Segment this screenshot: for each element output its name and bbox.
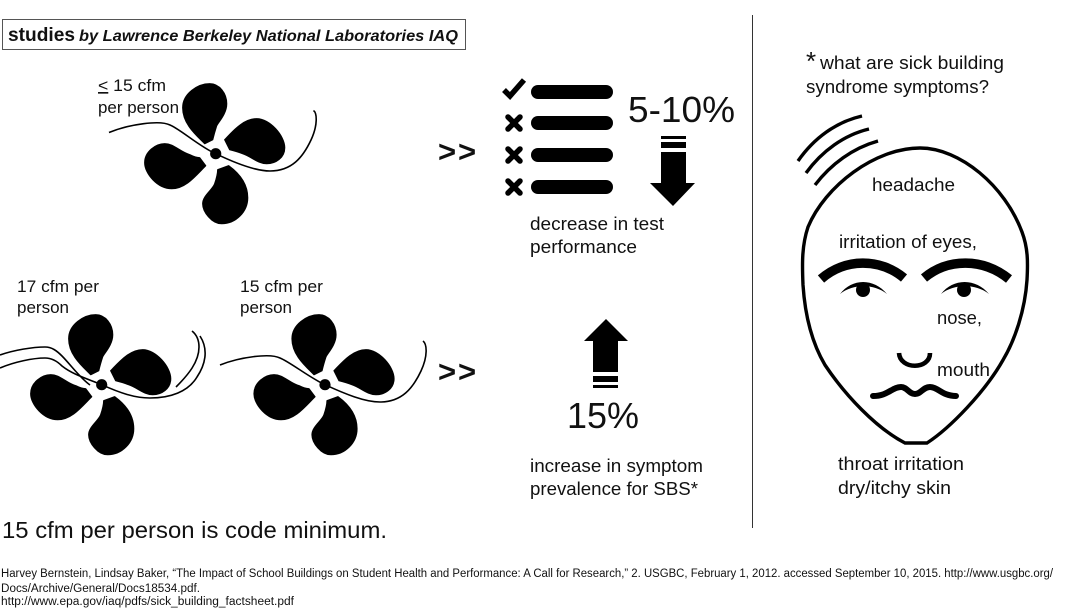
icon: cross 2 (508, 149, 520, 161)
icon: cross 1 (508, 117, 520, 129)
heading: studies (2, 20, 466, 50)
label: under 15 cfm per person: < 15 cfm (98, 77, 166, 95)
icon: fan with single airflow line (109, 84, 316, 224)
heading: studies: studies (8, 25, 75, 46)
arrow: chevrons to SBS result: > (458, 354, 476, 389)
icon: headache arcs (798, 116, 878, 185)
footer: sources: Docs/Archive/General/Docs18534.pdf. (1, 583, 200, 595)
stat: 5-10%: 5-10% (628, 89, 735, 130)
arrow: decrease (650, 136, 695, 206)
label: 17 cfm per person (17, 278, 100, 317)
icon: nose (899, 353, 930, 366)
heading: what are sick building syndrome symptoms (806, 46, 1004, 97)
icon: check mark (504, 80, 524, 96)
text: increase in symptom prevalence: increase in symptom (530, 456, 703, 476)
heading: what are sick building syndrome symptoms: * (806, 46, 816, 76)
heading: what are sick building syndrome symptoms: syndrome symptoms? (806, 77, 989, 97)
label: 17 cfm per person: 17 cfm per (17, 278, 100, 296)
icon: fan with double airflow lines (0, 315, 205, 455)
label: 15 cfm per person: person (240, 299, 292, 317)
text: throat and skin symptoms: throat irritation (838, 454, 964, 474)
footer: sources (1, 568, 1054, 608)
text: increase in symptom prevalence (530, 456, 703, 499)
footer: sources: Harvey Bernstein, Lindsay Baker, “The Impact of School Buildings on Student Health and Performance: A Call for Research,” 2. USGBC, February 1, 2012. accessed September 10, 2015. http://www.usgbc.org/ (1, 568, 1054, 580)
list bar 4 (531, 180, 613, 194)
icon: mouth (873, 387, 956, 396)
footer: sources: http://www.epa.gov/iaq/pdfs/sick_building_factsheet.pdf (1, 596, 295, 608)
icon: right eyebrow (924, 263, 1009, 279)
text: irritation of eyes: irritation of eyes, (839, 232, 977, 252)
arrow: increase (584, 319, 628, 388)
arrow: chevrons to test result: > (438, 134, 456, 169)
icon: fan with airflow line (220, 315, 426, 455)
arrow: chevrons to test result: > (458, 134, 476, 169)
text: mouth: mouth (937, 360, 990, 380)
text: throat and skin symptoms: dry/itchy skin (838, 478, 951, 498)
text: throat and skin symptoms (838, 454, 964, 498)
label: under 15 cfm per person: per person (98, 99, 179, 117)
text: nose: nose, (937, 308, 982, 328)
icon: left eyebrow (821, 263, 904, 279)
text: decrease in test performance: performance (530, 237, 637, 257)
arrow: chevrons to SBS result: > (438, 354, 456, 389)
list bar 1 (531, 85, 613, 99)
label: 15 cfm per person: 15 cfm per (240, 278, 324, 296)
label: 15 cfm per person (240, 278, 324, 317)
stat: 15%: 15% (567, 395, 639, 436)
icon: right eye (941, 282, 989, 297)
icon: left eye (840, 282, 887, 297)
list bar 3 (531, 148, 613, 162)
arrow: chevrons to test result (438, 134, 476, 169)
icon: test checklist (504, 80, 613, 194)
text: code minimum note: 15 cfm per person is code minimum. (2, 517, 387, 543)
text: decrease in test performance: decrease in test (530, 214, 664, 234)
label: under 15 cfm per person (98, 77, 179, 117)
text: increase in symptom prevalence: prevalence for SBS* (530, 479, 698, 499)
text: headache: headache (872, 175, 955, 195)
vertical panel divider (752, 15, 753, 528)
icon: face outline (803, 148, 1027, 443)
list bar 2 (531, 116, 613, 130)
arrow: chevrons to SBS result (438, 354, 476, 389)
heading: what are sick building syndrome symptoms: what are sick building (819, 53, 1004, 73)
label: 17 cfm per person: person (17, 299, 69, 317)
icon: cross 3 (508, 181, 520, 193)
heading: studies: by Lawrence Berkeley National Laboratories IAQ (79, 28, 459, 45)
text: decrease in test performance (530, 214, 664, 257)
